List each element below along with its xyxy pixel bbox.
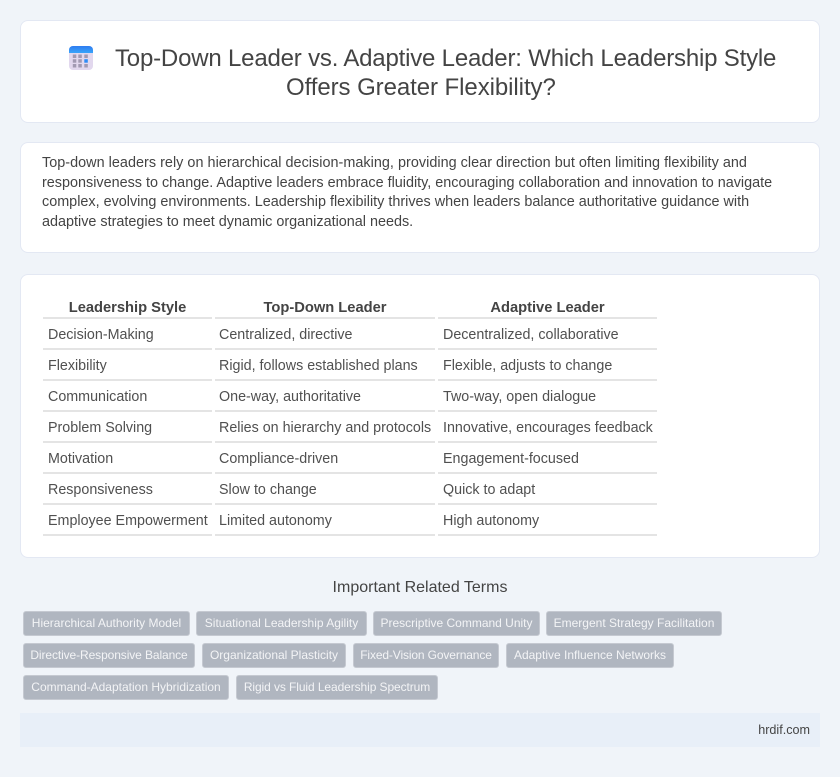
footer source: hrdif.com	[758, 723, 810, 737]
heading: related terms: Important Related Terms	[333, 579, 507, 596]
tag: Adaptive Influence Networks	[514, 648, 666, 662]
tag: Organizational Plasticity	[210, 648, 338, 662]
comparison table: Innovative, encourages feedback	[443, 420, 653, 436]
header: leadership style: Leadership Style	[69, 300, 186, 316]
tag	[353, 643, 499, 668]
tag: Rigid vs Fluid Leadership Spectrum	[244, 680, 430, 694]
tag: Situational Leadership Agility	[205, 616, 358, 630]
comparison table: Employee Empowerment	[48, 513, 208, 529]
comparison table: Engagement-focused	[443, 451, 579, 467]
footer bar	[20, 713, 820, 747]
tag	[196, 611, 367, 636]
tag	[546, 611, 722, 636]
comparison table: Centralized, directive	[219, 327, 352, 343]
comparison table: Quick to adapt	[443, 482, 535, 498]
panel: comparison table	[20, 274, 820, 558]
tag	[23, 643, 195, 668]
comparison table: Rigid, follows established plans	[219, 358, 418, 374]
comparison table: Flexible, adjusts to change	[443, 358, 612, 374]
tag	[506, 643, 674, 668]
comparison table: Flexibility	[48, 358, 107, 374]
tag: Prescriptive Command Unity	[380, 616, 533, 630]
tag	[202, 643, 346, 668]
comparison table: Limited autonomy	[219, 513, 332, 529]
summary text: Top-down leaders rely on hierarchical decision-making, providing clear direction but often limiting flexibility and	[42, 155, 747, 171]
title: Top-Down Leader vs. Adaptive Leader: Which Leadership Style	[115, 45, 776, 72]
tag	[236, 675, 438, 700]
comparison table: Motivation	[48, 451, 113, 467]
summary text: responsiveness to change. Adaptive leaders embrace fluidity, encouraging collaboration and innovation to navigate	[42, 175, 772, 191]
comparison table: Decentralized, collaborative	[443, 327, 619, 343]
summary text: adaptive strategies to meet dynamic organizational needs.	[42, 214, 413, 230]
icon: calendar	[69, 46, 93, 70]
title: Offers Greater Flexibility?	[286, 74, 556, 101]
tag: Fixed-Vision Governance	[360, 648, 492, 662]
comparison table: Communication	[48, 389, 147, 405]
tag: Emergent Strategy Facilitation	[554, 616, 714, 630]
summary text	[42, 155, 772, 230]
comparison table: Compliance-driven	[219, 451, 338, 467]
tag: Command-Adaptation Hybridization	[31, 680, 221, 694]
comparison table: Responsiveness	[48, 482, 153, 498]
comparison table: One-way, authoritative	[219, 389, 361, 405]
tag	[23, 611, 190, 636]
comparison table: Two-way, open dialogue	[443, 389, 596, 405]
tag: Hierarchical Authority Model	[32, 616, 181, 630]
panel: header	[20, 20, 820, 123]
comparison table: High autonomy	[443, 513, 539, 529]
panel: summary	[20, 142, 820, 253]
summary text: complex, evolving environments. Leadership flexibility thrives when leaders balance authoritative guidance with	[42, 194, 749, 210]
comparison table: Relies on hierarchy and protocols	[219, 420, 431, 436]
related term tags	[23, 611, 722, 700]
header: adaptive leader: Adaptive Leader	[490, 300, 605, 316]
title	[115, 45, 776, 101]
comparison table: Problem Solving	[48, 420, 152, 436]
header: top-down leader: Top-Down Leader	[264, 300, 386, 316]
tag	[373, 611, 540, 636]
comparison table	[43, 300, 657, 536]
tag: Directive-Responsive Balance	[30, 648, 188, 662]
comparison table: Slow to change	[219, 482, 317, 498]
comparison table: Decision-Making	[48, 327, 154, 343]
tag	[23, 675, 229, 700]
